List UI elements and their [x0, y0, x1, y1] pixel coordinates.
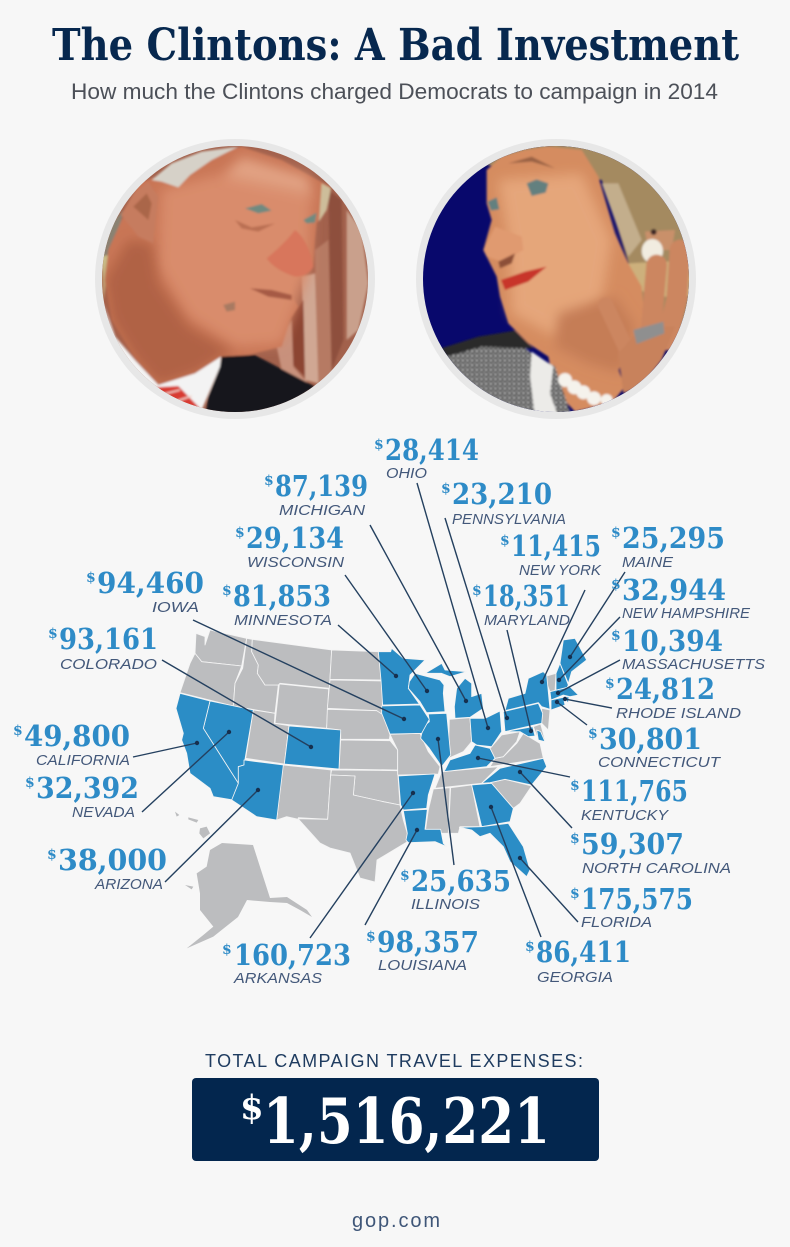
callout: Ohio: 28,414: [385, 433, 479, 467]
callout: Connecticut: CONNECTICUT: [598, 754, 722, 771]
callout: Louisiana: 98,357: [377, 925, 479, 959]
callout: Arizona: ARIZONA: [94, 876, 163, 893]
subtitle: How much the Clintons charged Democrats to campaign in 2014: [71, 79, 718, 104]
callout: Illinois: 25,635: [411, 864, 511, 898]
callout: Minnesota: 81,853: [233, 579, 331, 613]
callout: Massachusetts: MASSACHUSETTS: [622, 656, 765, 673]
portrait: Bill Clinton: [95, 139, 375, 420]
callout: Rhode Island: RHODE ISLAND: [616, 705, 741, 722]
callout: Connecticut: 30,801: [599, 722, 702, 756]
blue states: [176, 638, 587, 877]
callout: Maine: MAINE: [622, 554, 674, 571]
callout: California: 49,800: [24, 719, 130, 753]
callout: California: CALIFORNIA: [36, 752, 130, 769]
portrait: Hillary Clinton: [415, 139, 702, 423]
callout: Wisconsin: $: [235, 525, 245, 541]
mouth: [250, 288, 292, 300]
tie: [154, 386, 201, 409]
callout: Maine: $: [611, 525, 621, 541]
skin: [105, 147, 330, 385]
callout: Florida: [570, 882, 693, 931]
hand: [606, 250, 680, 353]
callout: Georgia: 86,411: [536, 935, 631, 969]
eyes: [488, 179, 548, 211]
lips: [501, 267, 547, 290]
callout: Louisiana: [366, 925, 479, 974]
callout: Iowa: $: [86, 570, 96, 586]
callout: New Hampshire: $: [611, 577, 621, 593]
nose: [267, 230, 313, 277]
ear: [120, 184, 154, 242]
callout: Georgia: $: [525, 939, 535, 955]
total heading: TOTAL CAMPAIGN TRAVEL EXPENSES:: [205, 1051, 583, 1071]
callout: Florida: 175,575: [581, 882, 693, 916]
callout: Minnesota: MINNESOTA: [234, 612, 332, 629]
callout: Arkansas: ARKANSAS: [233, 970, 322, 987]
callout: Connecticut: [588, 722, 722, 771]
callout: Pennsylvania: 23,210: [452, 477, 552, 511]
callout: Kentucky: KENTUCKY: [581, 807, 669, 824]
callout: Nevada: NEVADA: [72, 804, 135, 821]
callout: California: [13, 719, 130, 769]
callout: New York: 11,415: [511, 529, 601, 563]
callout: Nevada: 32,392: [36, 771, 139, 805]
callout: Louisiana: $: [366, 929, 376, 945]
callout: Wisconsin: 29,134: [246, 521, 344, 555]
callout: Massachusetts: 10,394: [622, 624, 723, 658]
callout: Maryland: $: [472, 583, 482, 599]
eyes: [245, 204, 317, 223]
callout: North Carolina: 59,307: [581, 827, 684, 861]
ear and earring: [645, 230, 675, 250]
callout: Michigan: $: [264, 473, 274, 489]
Alaska and Hawaii: [175, 812, 312, 948]
jacket: [447, 345, 572, 412]
callout: North Carolina: NORTH CAROLINA: [582, 860, 731, 877]
callout: Pennsylvania: $: [441, 481, 451, 497]
callout: New Hampshire: 32,944: [622, 573, 726, 607]
hair: [152, 147, 238, 187]
callout: Massachusetts: [611, 624, 765, 673]
callout: Wisconsin: WISCONSIN: [247, 554, 344, 571]
callout: Arkansas: $: [222, 942, 232, 958]
footer: gop.com: gop.com: [352, 1210, 440, 1232]
callout: North Carolina: $: [570, 831, 580, 847]
callout: Rhode Island: [605, 672, 741, 722]
callout: Maryland: [472, 579, 570, 629]
callout: Colorado: 93,161: [59, 622, 158, 656]
callout: Ohio: $: [374, 437, 384, 453]
callout: Maryland: 18,351: [483, 579, 570, 613]
callout: Ohio: [374, 433, 479, 482]
callout: New Hampshire: NEW HAMPSHIRE: [622, 605, 751, 622]
callout: Arizona: $: [47, 847, 57, 863]
callout: Pennsylvania: PENNSYLVANIA: [452, 511, 566, 528]
callout: Nevada: $: [25, 775, 35, 791]
callout: Colorado: $: [48, 626, 58, 642]
total box: $: [240, 1088, 264, 1128]
callout: Georgia: [525, 935, 631, 986]
callout: New York: [500, 529, 602, 579]
callout: New York: NEW YORK: [519, 562, 602, 579]
total box: 1,516,221: [263, 1084, 550, 1158]
callout: Kentucky: $: [570, 778, 580, 794]
gray states: [180, 630, 556, 882]
callout: Georgia: GEORGIA: [537, 969, 613, 986]
callout: Rhode Island: $: [605, 676, 615, 692]
callout: Colorado: [48, 622, 158, 673]
callout: Ohio: OHIO: [386, 465, 427, 482]
callout: Minnesota: $: [222, 583, 232, 599]
callout: Arizona: 38,000: [58, 843, 167, 877]
callout: California: $: [13, 723, 23, 739]
callout: Colorado: COLORADO: [60, 656, 157, 673]
pearls: [558, 373, 613, 406]
callout: Illinois: [400, 864, 511, 913]
hair: [486, 146, 688, 332]
skin: [483, 147, 645, 412]
callout: Maryland: MARYLAND: [484, 612, 570, 629]
callout: Iowa: 94,460: [97, 566, 204, 600]
callout: Florida: $: [570, 886, 580, 902]
callout: Massachusetts: $: [611, 628, 621, 644]
callout: Arkansas: [222, 938, 351, 987]
callout: Illinois: ILLINOIS: [411, 896, 480, 913]
callout: Kentucky: [570, 774, 688, 824]
callout: Arkansas: 160,723: [234, 938, 351, 972]
callout: Connecticut: $: [588, 726, 598, 742]
callout: Minnesota: [222, 579, 332, 629]
callout: Florida: FLORIDA: [581, 914, 652, 931]
callout: Michigan: [264, 469, 368, 519]
callout: Maine: 25,295: [622, 521, 725, 555]
callout: Michigan: MICHIGAN: [279, 502, 365, 519]
callout: Michigan: 87,139: [275, 469, 368, 503]
callout: Rhode Island: 24,812: [616, 672, 715, 706]
callout: Nevada: [25, 771, 139, 821]
callout: Wisconsin: [235, 521, 344, 571]
callout: Maine: [611, 521, 725, 571]
shirt: [103, 303, 221, 410]
callout: New York: $: [500, 533, 510, 549]
callout: North Carolina: [570, 827, 731, 877]
callout: Illinois: $: [400, 868, 410, 884]
suit: [205, 355, 315, 418]
callout: Louisiana: LOUISIANA: [378, 957, 467, 974]
callout: Iowa: [86, 566, 204, 616]
callout: Kentucky: 111,765: [581, 774, 688, 808]
callout: Iowa: IOWA: [152, 599, 199, 616]
map: United States: [175, 630, 587, 948]
callout: Pennsylvania: [441, 477, 566, 528]
callout: New Hampshire: [611, 573, 751, 622]
leader lines: [133, 483, 625, 938]
callout: Arizona: [47, 843, 167, 893]
